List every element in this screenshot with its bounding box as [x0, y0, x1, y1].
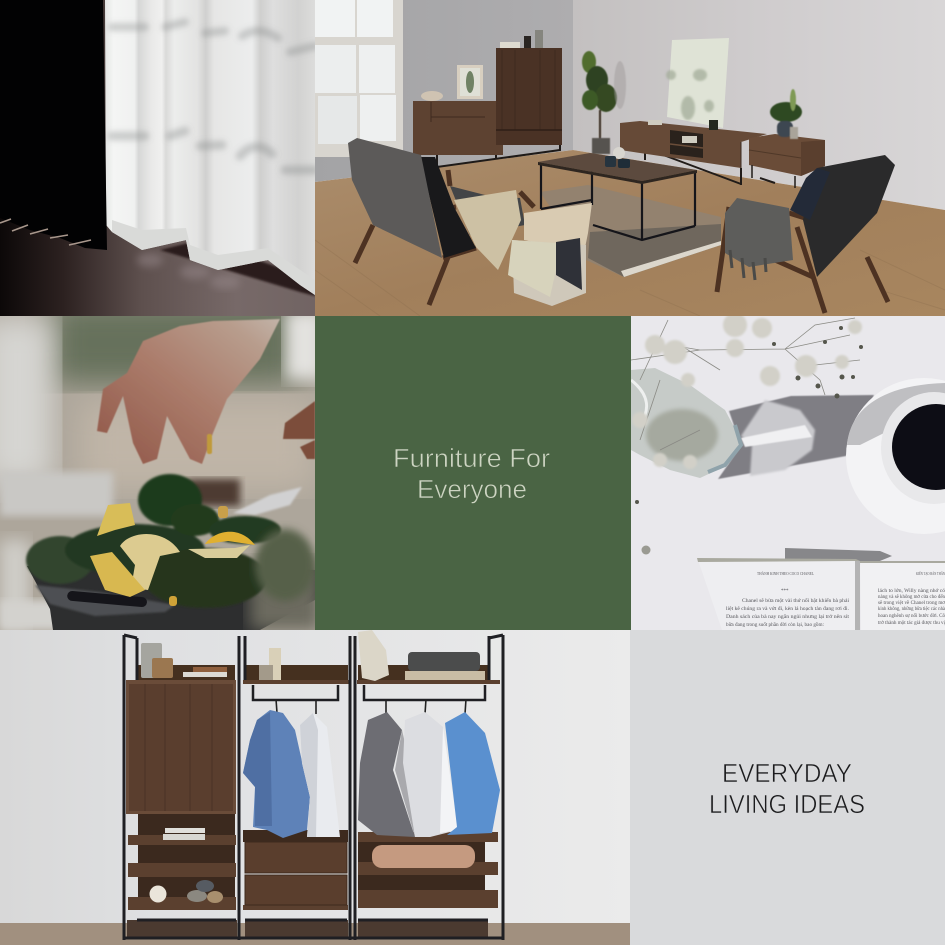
open book: [697, 548, 945, 630]
steel frame: [124, 635, 503, 940]
photo: hand over salad: [0, 300, 325, 630]
book text: Danh sách của bà nay ngắn ngủi nhưng lại trở nên sít: [726, 613, 849, 620]
back wall: [315, 0, 573, 182]
baby's breath blooms: [632, 313, 863, 554]
tv unit plant: [770, 89, 802, 139]
side wall: [573, 0, 945, 210]
heading: Furniture For Everyone: Furniture For: [393, 443, 550, 473]
pan: [27, 560, 320, 630]
hand: [97, 319, 315, 464]
shelf items: [141, 630, 485, 903]
wood floor: [315, 150, 945, 316]
book text: lách to lớn, Willy nàng nhớ có: [878, 588, 945, 594]
dark back panels: [127, 665, 488, 938]
coffee cup and saucer: [846, 378, 945, 534]
black blackout curtain: [0, 0, 107, 250]
throw blanket: [454, 190, 521, 270]
cabinet door: [126, 680, 236, 814]
book text: ***: [781, 589, 789, 594]
book text: Chanel sẽ bừa một vài thứ nổi bật khiến bà phải: [742, 597, 849, 604]
glass vase: [631, 368, 741, 478]
panel: grey tagline tile: [630, 630, 945, 945]
left armchair: [348, 138, 534, 305]
light slits at curtain foot: [0, 219, 91, 245]
heading: Everyday Living Ideas: LIVING IDEAS: [709, 789, 865, 819]
heading: Furniture For Everyone: [393, 443, 550, 504]
hangers: [276, 699, 466, 714]
floor plant: [582, 51, 626, 154]
photo: curtains: [0, 0, 315, 316]
sideboard and tall cabinet: [413, 30, 562, 167]
white tablecloth: [631, 316, 945, 630]
panel: green title tile: [315, 316, 631, 630]
art canvas: [666, 38, 729, 128]
heading: Everyday Living Ideas: [709, 758, 865, 819]
gap under curtain: [160, 240, 315, 296]
photo: flowers, coffee and book: [631, 313, 945, 630]
heading: Everyday Living Ideas: EVERYDAY: [722, 758, 852, 788]
greens: [26, 474, 315, 608]
basket with cushion and towels: [508, 203, 592, 306]
photo: wardrobe: [0, 630, 630, 945]
carpet sunlight patches: [137, 253, 240, 289]
heading: Furniture For Everyone: Everyone: [417, 474, 527, 504]
drawers: [245, 842, 347, 905]
coffee table: [538, 147, 697, 240]
tv unit: [620, 89, 825, 188]
book text: liệt kê chúng ra và vứt đi, kèn lá hoạch tàn đang rơi đi.: [726, 606, 850, 612]
baby's breath branches: [631, 318, 860, 450]
rug: [540, 185, 721, 277]
window shadow bands: [112, 22, 315, 170]
wooden shelves: [128, 680, 500, 910]
wall and floor: [0, 630, 630, 945]
vase shadow: [718, 395, 874, 479]
book text: THÀNH KINH THEO COCO CHANEL: [757, 571, 814, 576]
book text: bữa đang trong suốt phần đời còn lại, bao gồm:: [726, 621, 824, 628]
mugs: [605, 147, 630, 168]
lemon slices: [90, 503, 255, 606]
right armchair: [717, 155, 895, 313]
blurred background: [0, 300, 325, 630]
photo: living room: [315, 0, 945, 316]
book text: [726, 571, 945, 628]
white sheer curtain: [105, 0, 315, 295]
hanging shirts: [243, 710, 500, 838]
window: [315, 0, 403, 157]
